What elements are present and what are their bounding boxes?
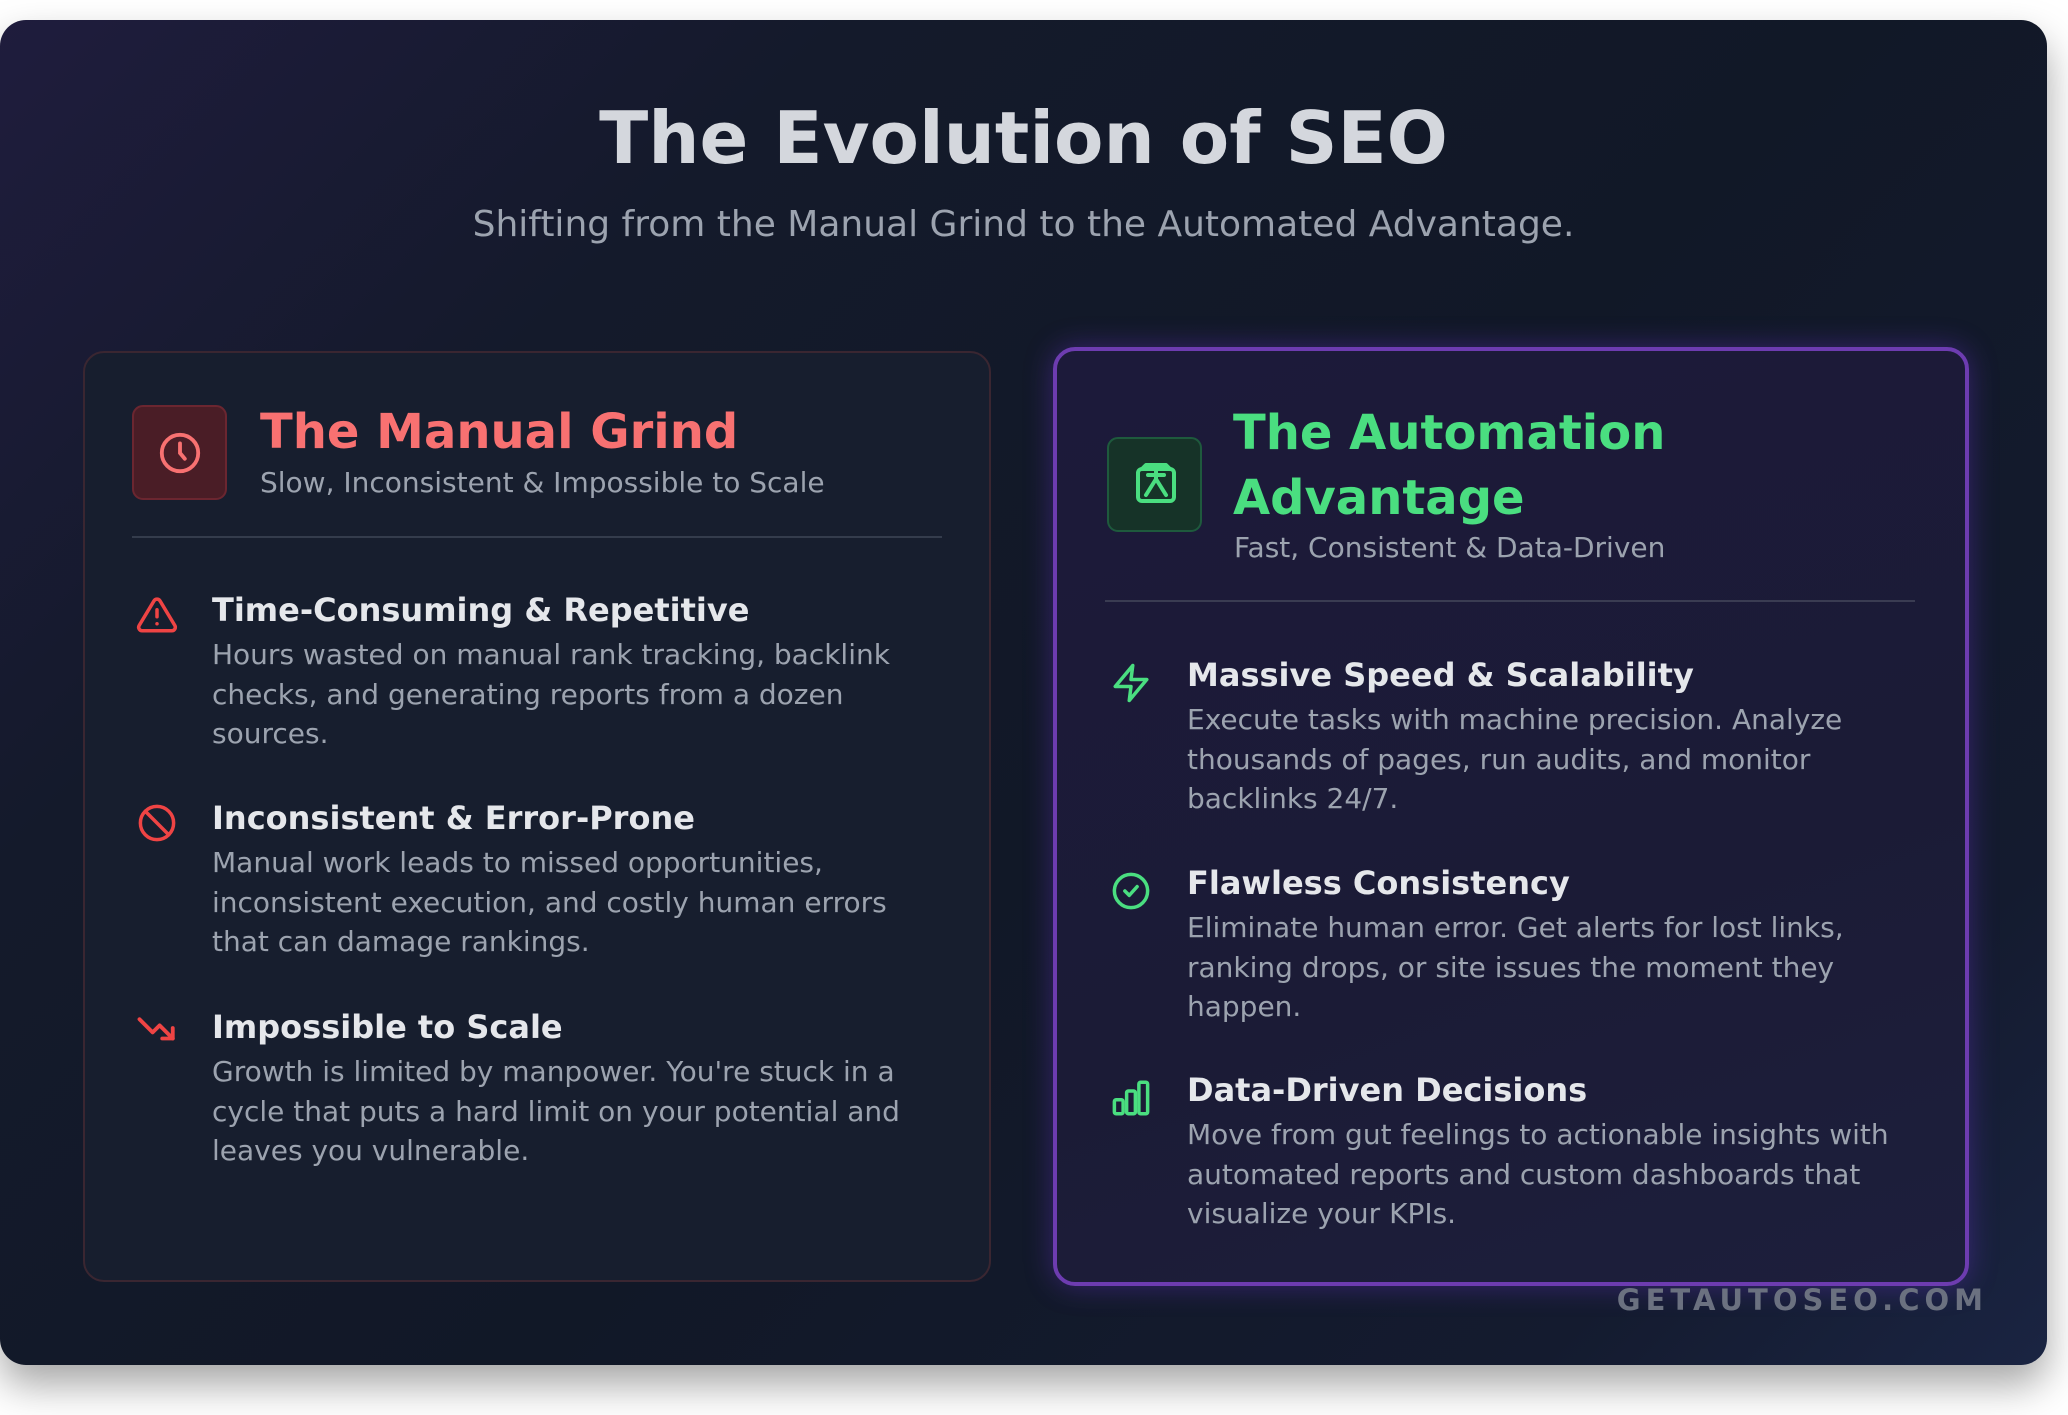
item: inconsistent: Manual work leads to missed opportunities, inconsistent execution, and costly human errors that can damage rankings. [212, 846, 887, 958]
item: impossible to scale: Growth is limited by manpower. You're stuck in a cycle that puts a hard limit on your potential and leaves you vulnerable. [212, 1055, 900, 1167]
icon: trending down [138, 1017, 175, 1040]
panel subtitle: Fast, Consistent & Data-Driven [1234, 531, 1665, 564]
icon: warning [136, 597, 178, 632]
icon: automation [1107, 437, 1202, 532]
item: speed: Massive Speed & Scalability [1187, 656, 1694, 694]
title: The Evolution of SEO [599, 96, 1448, 180]
panel title: The Automation [1233, 405, 1665, 461]
panel: automation advantage [1053, 347, 1969, 1286]
icon: clock [132, 405, 227, 500]
item: time-consuming [136, 591, 890, 750]
item: data-driven [1112, 1071, 1889, 1230]
item: impossible to scale: Impossible to Scale [212, 1008, 563, 1046]
icon: bar chart [1112, 1080, 1150, 1116]
item: data-driven: Move from gut feelings to actionable insights with automated reports and custom dashboards that visualize your KPIs. [1187, 1118, 1889, 1230]
icon: bolt [1113, 664, 1149, 702]
item: inconsistent: Inconsistent & Error-Prone [212, 799, 695, 837]
item: impossible to scale [138, 1008, 900, 1167]
subtitle: Shifting from the Manual Grind to the Automated Advantage. [473, 204, 1574, 245]
item: speed [1113, 656, 1842, 815]
item: speed: Execute tasks with machine precision. Analyze thousands of pages, run audits, and monitor backlinks 24/7. [1187, 703, 1842, 815]
watermark: GETAUTOSEO.COM [1617, 1283, 1988, 1317]
item: consistency: Eliminate human error. Get alerts for lost links, ranking drops, or site issues the moment they happen. [1187, 911, 1844, 1023]
item: data-driven: Data-Driven Decisions [1187, 1071, 1587, 1109]
icon: ban [138, 804, 176, 842]
panel subtitle: Slow, Inconsistent & Impossible to Scale [260, 466, 825, 499]
icon: check circle [1112, 872, 1150, 910]
item: consistency [1112, 864, 1844, 1023]
item: inconsistent [138, 799, 887, 958]
panel title: The Manual Grind [260, 404, 738, 460]
panel: manual grind [83, 351, 991, 1282]
item: time-consuming: Time-Consuming & Repetitive [212, 591, 749, 629]
item: consistency: Flawless Consistency [1187, 864, 1570, 902]
panel title: Advantage [1233, 470, 1525, 526]
item: time-consuming: Hours wasted on manual rank tracking, backlink checks, and generating reports from a dozen sources. [212, 638, 890, 750]
panel title [1233, 405, 1665, 526]
